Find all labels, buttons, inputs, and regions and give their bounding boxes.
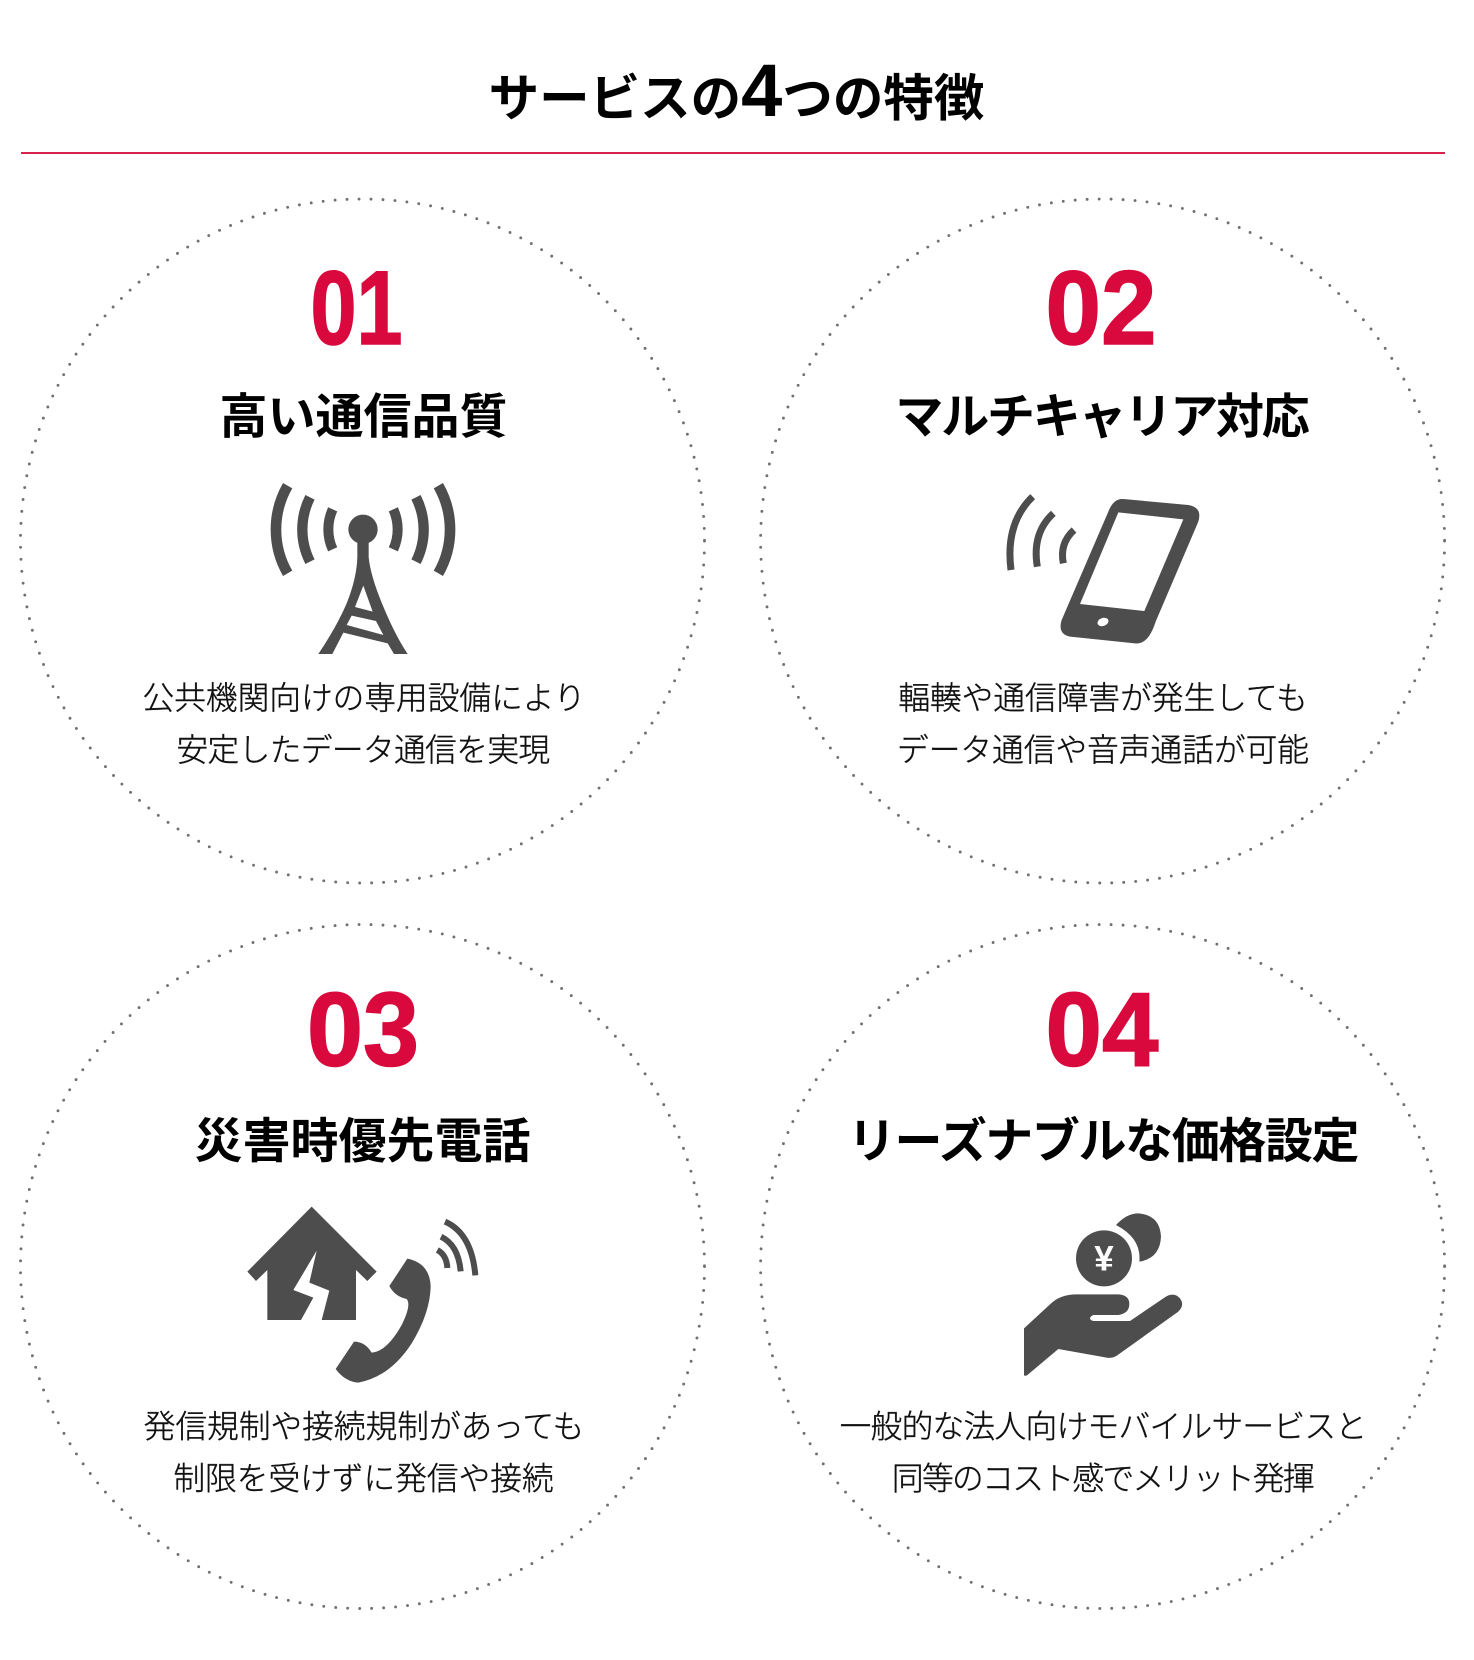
heading 01: 高い通信品質 [219,391,508,444]
dotted circle 01 [20,199,704,883]
panel: feature 03 [20,924,704,1608]
description 03 [144,1408,584,1496]
dotted circle 02 [761,199,1445,883]
dotted circle 03 [20,924,704,1608]
icon: hand with yen coins: ¥ [1094,1240,1114,1279]
number 04: 04 [1046,972,1158,1088]
number 03: 03 [307,972,419,1088]
number 02: 02 [1046,250,1156,367]
number 01: 01 [310,250,402,367]
description 04 [840,1408,1366,1496]
description 03: 制限を受けずに発信や接続 [173,1460,554,1496]
heading 04: リーズナブルな価格設定 [848,1116,1358,1168]
description 01 [142,680,586,768]
panel: feature 02 [761,199,1445,883]
description 02: 輻輳や通信障害が発生しても [898,680,1308,716]
description 01: 公共機関向けの専用設備により [142,680,586,716]
description 03: 発信規制や接続規制があっても [144,1408,584,1444]
heading 03: 災害時優先電話 [194,1116,531,1168]
title: サービスの4つの特徴 [489,49,984,132]
description 01: 安定したデータ通信を実現 [176,732,550,768]
icon: smartphone with signal [1010,497,1199,643]
icon: hand with yen coins [1024,1213,1182,1376]
icon: damaged house and phone [247,1207,475,1383]
dotted circle 04 [761,924,1445,1608]
panel: feature 04 [761,924,1445,1608]
description 02: データ通信や音声通話が可能 [897,732,1309,768]
description 02 [897,680,1309,768]
panel: feature 01 [20,199,704,883]
description 04: 同等のコスト感でメリット発揮 [892,1460,1314,1496]
heading 02: マルチキャリア対応 [895,391,1310,444]
icon: antenna tower [276,486,450,654]
description 04: 一般的な法人向けモバイルサービスと [840,1408,1366,1444]
